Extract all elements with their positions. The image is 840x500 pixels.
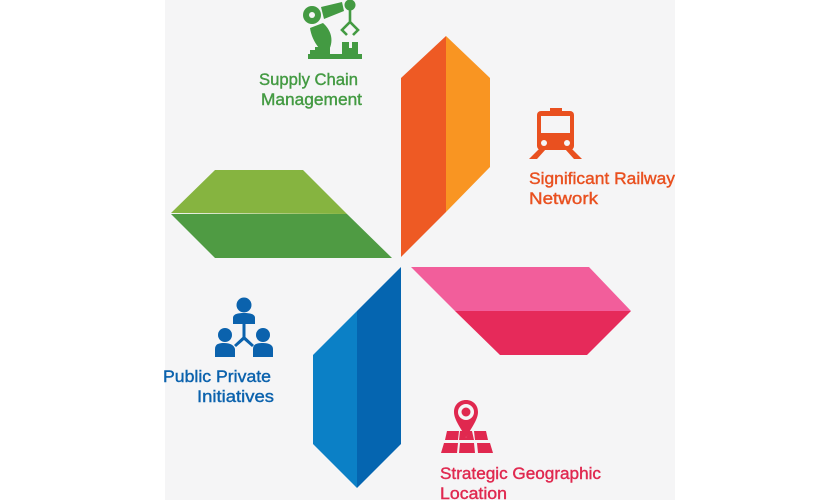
label: significant railway network: Significant Railway <box>529 169 675 188</box>
label: supply chain: Supply Chain <box>259 70 358 89</box>
petal: geographic location (pink) <box>411 267 631 355</box>
label: supply chain: Management <box>261 90 362 109</box>
petal: public private (blue) <box>313 267 401 488</box>
icon: robot arm <box>303 0 362 59</box>
icon: people network <box>215 298 273 357</box>
background panel <box>165 0 675 500</box>
label: public private initiatives: Initiatives <box>197 387 274 406</box>
icon: train <box>529 108 582 159</box>
label: strategic geographic location: Strategic Geographic <box>440 464 601 483</box>
label: public private initiatives <box>163 367 274 406</box>
label: public private initiatives: Public Private <box>163 367 271 386</box>
petal: railway (orange) <box>401 36 490 257</box>
label: significant railway network: Network <box>529 189 599 208</box>
label: supply chain <box>259 70 362 109</box>
label: strategic geographic location <box>440 464 601 500</box>
icon: map pin <box>441 400 493 453</box>
petal: supply chain (green) <box>171 170 392 258</box>
label: significant railway network <box>529 169 675 208</box>
